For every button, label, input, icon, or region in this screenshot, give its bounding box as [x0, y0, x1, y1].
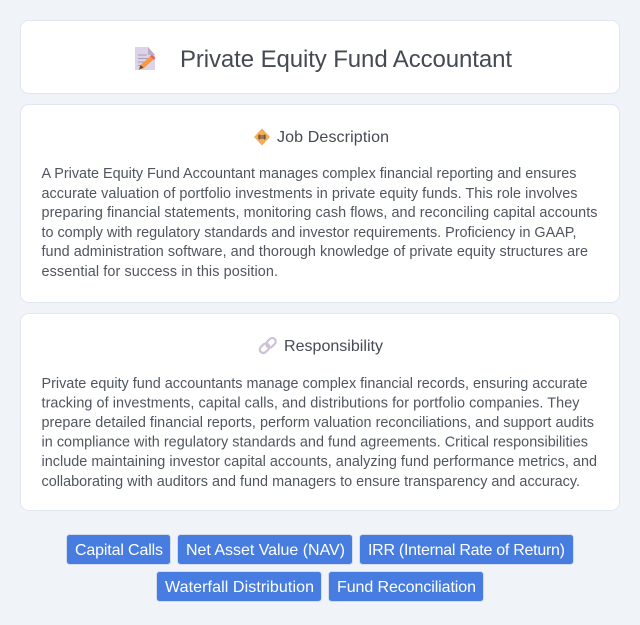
tag: capital calls	[66, 534, 170, 564]
text block: job description: A Private Equity Fund Accountant manages complex financial reporting and ensures	[42, 166, 576, 182]
text block: responsibility	[42, 376, 597, 490]
tag: internal rate of return: IRR (Internal Rate of Return)	[368, 542, 565, 559]
icon: chain link	[258, 337, 277, 354]
tag: waterfall distribution: Waterfall Distribution	[165, 579, 314, 596]
text block: job description	[42, 166, 598, 280]
tag: net asset value	[178, 534, 352, 564]
heading: responsibility: Responsibility	[284, 338, 383, 355]
icon: diamond puzzle	[254, 128, 270, 146]
text block: responsibility: tracking of investments, capital calls, and distributions for portfolio companies. They	[42, 396, 580, 412]
title: Private Equity Fund Accountant	[180, 46, 512, 73]
tag: capital calls: Capital Calls	[75, 542, 163, 559]
tag: waterfall distribution	[156, 572, 322, 602]
text block: job description: essential for success in this position.	[42, 264, 278, 280]
tag: fund reconciliation: Fund Reconciliation	[337, 579, 476, 596]
tag: net asset value: Net Asset Value (NAV)	[186, 542, 345, 559]
text block: responsibility: Private equity fund accountants manage complex financial records, ensuring accurate	[42, 376, 588, 392]
panel: title card	[20, 20, 620, 94]
panel: job description	[20, 104, 620, 302]
icon: memo with pencil	[135, 47, 156, 70]
text block: job description: to comply with regulatory standards and investor requirements. Proficiency in GAAP,	[42, 225, 576, 241]
text block: responsibility: include maintaining investor capital accounts, analyzing fund performance metrics, and	[42, 454, 597, 470]
text block: responsibility: in compliance with regulatory standards and fund agreements. Critical responsibilities	[42, 434, 588, 450]
tag: fund reconciliation	[328, 572, 484, 602]
text block: job description: accurate valuation of portfolio investments in private equity funds. This role involves	[42, 186, 578, 202]
tag: internal rate of return	[360, 534, 574, 564]
text block: job description: preparing financial statements, monitoring cash flows, and reconciling capital accounts	[42, 205, 598, 221]
text block: job description: fund administration software, and thorough knowledge of private equity structures are	[42, 244, 588, 260]
text block: responsibility: collaborating with auditors and fund managers to ensure transparency and accuracy.	[42, 474, 580, 490]
text block: responsibility: prepare detailed financial reports, perform valuation reconciliations, and support audits	[42, 415, 594, 431]
panel: responsibility	[20, 314, 620, 510]
heading: job description: Job Description	[277, 129, 389, 146]
